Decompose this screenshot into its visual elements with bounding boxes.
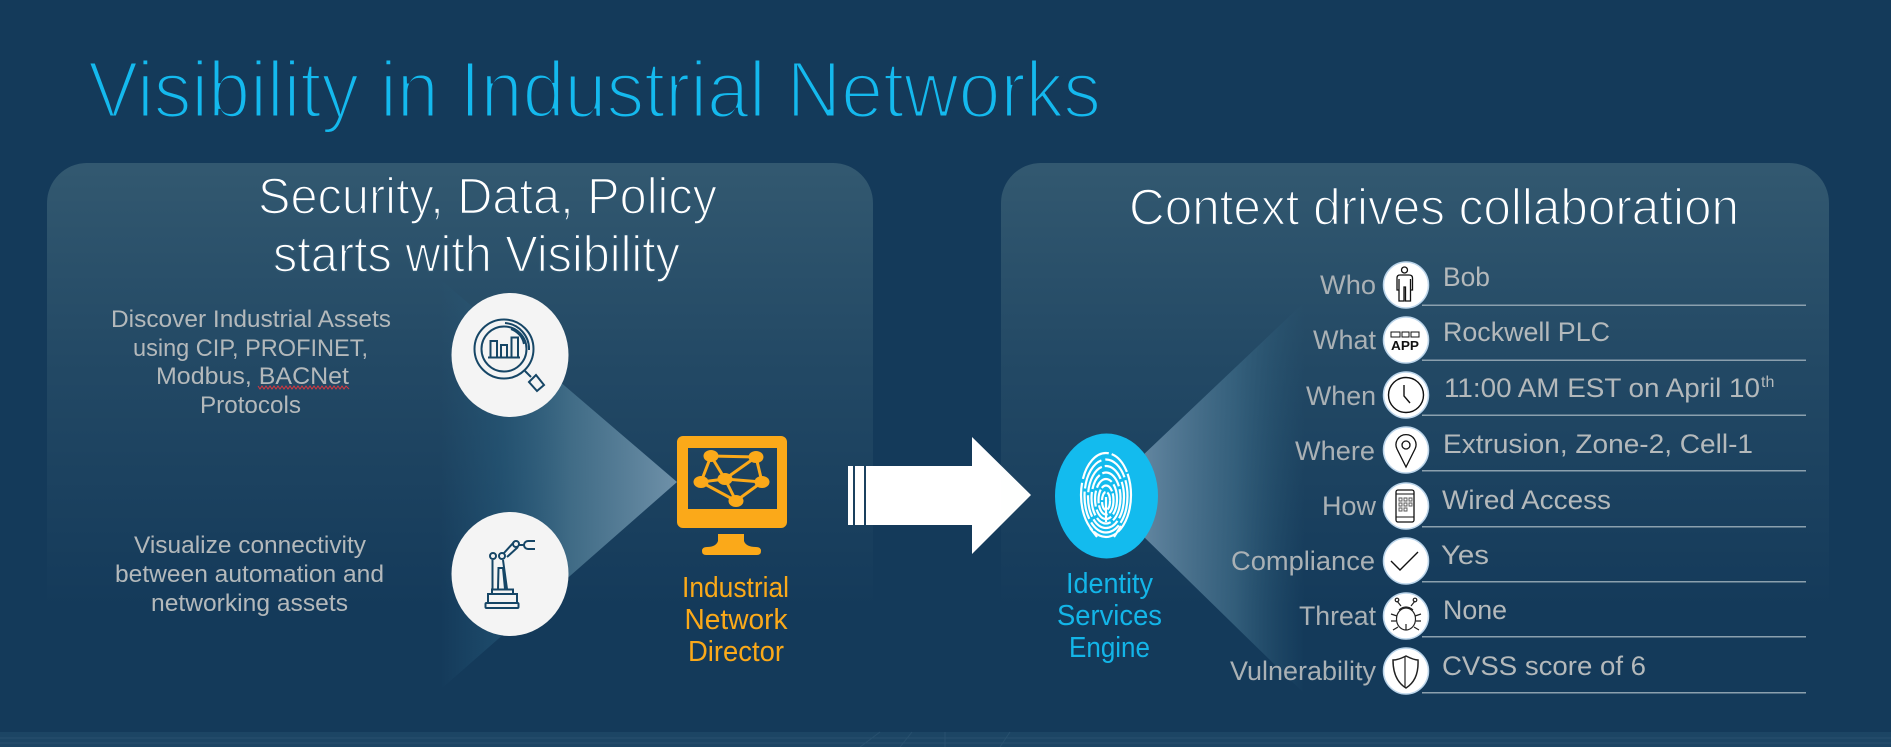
text block: discover assets: using CIP, PROFINET, — [133, 335, 368, 362]
arrow — [848, 437, 1031, 554]
row: where: Where — [1295, 436, 1375, 466]
icon: industrial network director monitor — [677, 436, 787, 555]
text block: discover assets: Protocols — [200, 392, 301, 419]
icon: check mark — [1384, 538, 1428, 584]
row: where — [1295, 427, 1806, 473]
panel background left — [47, 163, 873, 643]
row: who: Who — [1320, 270, 1376, 300]
row: when: When — [1306, 381, 1376, 411]
icon: location pin — [1384, 427, 1428, 473]
row: threat — [1299, 593, 1806, 639]
label: identity services engine — [1057, 568, 1162, 664]
row: threat: Threat — [1299, 601, 1377, 631]
icon: shield — [1384, 648, 1428, 694]
text block: discover assets — [111, 306, 391, 419]
row: where: Extrusion, Zone-2, Cell-1 — [1443, 429, 1753, 459]
icon: magnifier with bar chart — [452, 293, 568, 417]
text block: discover assets: Discover Industrial Assets — [111, 306, 391, 333]
panel background right — [1001, 163, 1829, 643]
row: what: Rockwell PLC — [1443, 317, 1610, 347]
text block: visualize connectivity — [115, 532, 384, 617]
text block: visualize connectivity: between automation and — [115, 561, 384, 588]
icon: bug — [1384, 593, 1428, 639]
superscript th: th — [1761, 374, 1774, 391]
row: who — [1320, 262, 1806, 308]
label: identity services engine: Engine — [1069, 632, 1150, 664]
row: vulnerability: Vulnerability — [1230, 656, 1377, 686]
label: industrial network director — [682, 572, 789, 668]
title: Visibility in Industrial Networks — [88, 45, 1101, 134]
row: vulnerability — [1230, 648, 1806, 694]
label: industrial network director: Director — [688, 636, 784, 668]
icon: person — [1384, 262, 1428, 308]
row: compliance: Yes — [1441, 540, 1489, 570]
text block: visualize connectivity: networking assets — [151, 590, 348, 617]
panel: security, data, policy — [47, 163, 873, 690]
row: compliance: Compliance — [1231, 546, 1375, 576]
icon: app: APP — [1391, 339, 1419, 353]
label: industrial network director: Network — [684, 604, 788, 636]
icon: robot arm — [452, 512, 568, 636]
row: threat: None — [1443, 595, 1507, 625]
panel heading left — [258, 168, 717, 282]
icon: mobile phone — [1384, 483, 1428, 529]
spell-check squiggle — [258, 386, 349, 389]
icon: app — [1384, 317, 1428, 363]
light cone from identity services engine — [1101, 291, 1316, 705]
icon: fingerprint identity services engine — [1055, 434, 1158, 558]
text block: discover assets: Modbus, BACNet — [156, 363, 349, 390]
row: how: Wired Access — [1442, 485, 1611, 515]
row: when — [1306, 372, 1806, 418]
panel: context drives collaboration — [1001, 163, 1829, 705]
icon: clock — [1384, 372, 1428, 418]
row: vulnerability: CVSS score of 6 — [1442, 651, 1646, 681]
light cone to Industrial Network Director — [440, 279, 677, 690]
label: identity services engine: Identity — [1066, 568, 1154, 600]
row: what — [1313, 317, 1806, 363]
panel heading left: Security, Data, Policy — [258, 168, 717, 224]
row: what: What — [1313, 325, 1377, 355]
label: industrial network director: Industrial — [682, 572, 789, 604]
row: how — [1322, 483, 1806, 529]
row: who: Bob — [1443, 262, 1490, 292]
text block: visualize connectivity: Visualize connectivity — [134, 532, 366, 559]
panel heading right: Context drives collaboration — [1129, 178, 1739, 236]
row: compliance — [1231, 538, 1806, 584]
row: how: How — [1322, 491, 1377, 521]
row: when: 11:00 AM EST on April 10 — [1444, 373, 1760, 403]
panel heading left: starts with Visibility — [273, 226, 680, 282]
label: identity services engine: Services — [1057, 600, 1162, 632]
